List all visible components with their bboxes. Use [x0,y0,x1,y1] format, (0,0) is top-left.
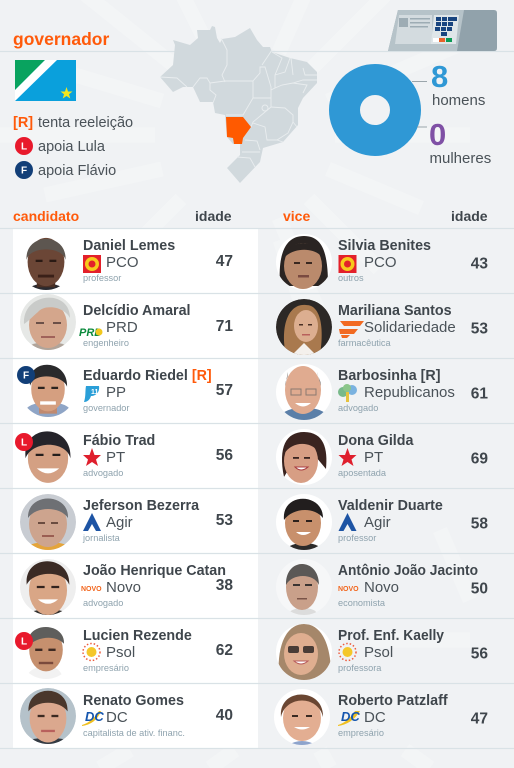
candidate: Fábio Trad: advogado [83,468,123,478]
title: governador [13,29,109,49]
candidate: Renato Gomes: DC [85,709,104,724]
candidate: Fábio Trad: Fábio Trad [83,433,155,449]
candidate: Renato Gomes: DC [106,709,128,726]
vice: Prof. Enf. Kaelly: Prof. Enf. Kaelly [338,628,444,644]
vice: Antônio João Jacinto [286,564,488,615]
vice: Mariliana Santos: Mariliana Santos [338,303,452,319]
candidate: Renato Gomes [20,688,233,749]
candidate: Lucien Rezende [15,627,233,680]
white panel: candidates column [13,229,258,748]
candidate: João Henrique Catan: advogado [83,598,123,608]
vice: Mariliana Santos: farmacêutica [338,338,391,348]
vice: Mariliana Santos: Solidariedade [364,319,456,336]
map: Mato Grosso do Sul highlighted [226,117,251,144]
vice: Silvia Benites: PCO [364,254,397,271]
vice: Antônio João Jacinto: 50 [471,580,488,598]
vice: Barbosinha: advogado [338,403,378,413]
vice: Mariliana Santos: 53 [471,320,488,338]
stat: men: homens [432,92,485,109]
candidate: João Henrique Catan [20,559,233,621]
vice: Antônio João Jacinto: NOVO [338,586,359,593]
vice: Barbosinha: 61 [471,386,488,402]
badge: supports Flávio [17,366,35,384]
badge: supports Lula: L [21,636,27,648]
vice: Silvia Benites: outros [338,273,364,283]
vice: Mariliana Santos [276,299,488,355]
badge: supports Flávio: F [23,370,29,382]
stat: men: 8 [431,59,448,94]
vice: Antônio João Jacinto: Novo [364,579,399,596]
candidate: Delcídio Amaral: engenheiro [83,338,129,348]
candidate: Delcídio Amaral: 71 [216,318,233,335]
candidate: Daniel Lemes: professor [83,273,121,283]
candidate: Lucien Rezende: empresário [83,663,129,673]
column headers: candidato [13,208,79,224]
donut chart: gender split [344,59,491,167]
candidate: João Henrique Catan: João Henrique Catan [83,563,226,579]
vice: Dona Gilda: PT [364,449,383,466]
column headers: vice [283,208,310,224]
vice: Barbosinha: Republicanos [364,384,455,401]
badge: supports Lula [15,433,33,451]
vice: Silvia Benites: Silvia Benites [338,238,431,254]
candidate: Delcídio Amaral: PRD [106,319,138,336]
vice: Barbosinha: Barbosinha [R] [338,368,440,384]
candidate: Jeferson Bezerra: 53 [216,512,233,529]
candidate: Fábio Trad [15,431,233,483]
vice: Antônio João Jacinto: Antônio João Jacinto [338,563,478,579]
vice: Prof. Enf. Kaelly: professora [338,663,382,673]
icon: Mato Grosso do Sul flag [15,60,76,101]
vice: Roberto Patzlaff: empresário [338,728,384,738]
legend: reelection: [R] [13,115,33,131]
vice: Roberto Patzlaff: DC [364,709,386,726]
candidate: Renato Gomes: capitalista de ativ. financ. [83,728,185,738]
candidate: Eduardo Riedel [17,365,233,420]
vice: Silvia Benites: 43 [471,256,488,272]
vice: Silvia Benites [276,234,488,290]
vice: Dona Gilda [276,429,488,485]
column headers [13,208,488,224]
vice: Valdenir Duarte: Valdenir Duarte [338,498,443,514]
stat: men [431,59,485,109]
vice: Valdenir Duarte: professor [338,533,376,543]
candidate: Lucien Rezende: Lucien Rezende [83,628,192,644]
vice: Barbosinha [276,364,488,420]
candidate: Daniel Lemes: PCO [106,254,139,271]
icon: voting machine [388,10,497,51]
map of Brazil [160,26,317,183]
candidate: Renato Gomes: Renato Gomes [83,693,184,709]
candidate: Delcídio Amaral: PRD [79,327,102,339]
vice: Valdenir Duarte: Agir [364,514,391,531]
candidate: Eduardo Riedel: 11 [91,389,99,396]
column headers: idade [451,208,488,224]
legend: supports Lula: apoia Lula [38,139,106,155]
candidate: João Henrique Catan: NOVO [81,586,102,593]
candidate: Jeferson Bezerra: Agir [106,514,133,531]
legend [13,115,133,179]
badge: supports Lula: L [21,438,27,448]
candidate: Eduardo Riedel: 57 [216,382,233,399]
legend: reelection: tenta reeleição [38,115,133,131]
candidate: João Henrique Catan: 38 [216,577,233,594]
vice: Dona Gilda: Dona Gilda [338,433,415,449]
vice: Valdenir Duarte [276,494,488,555]
candidate: João Henrique Catan: Novo [106,579,141,596]
legend: supports Lula: L [21,142,27,152]
vice: Prof. Enf. Kaelly: 56 [471,646,488,662]
candidate: Delcídio Amaral [20,294,233,350]
vice: Prof. Enf. Kaelly [276,624,488,680]
candidate: Daniel Lemes: 47 [216,253,233,270]
candidate: Jeferson Bezerra: jornalista [82,533,121,543]
vice: Roberto Patzlaff [274,689,488,745]
candidate: Jeferson Bezerra: Jeferson Bezerra [83,498,200,514]
candidate: Eduardo Riedel: governador [83,403,129,413]
candidate: Daniel Lemes [26,238,233,295]
vice: Dona Gilda: 69 [471,450,488,468]
vice: Roberto Patzlaff: 47 [471,710,488,728]
candidate: Fábio Trad: PT [106,449,125,466]
candidate: Eduardo Riedel: Eduardo Riedel [R] [83,368,212,384]
vice: Prof. Enf. Kaelly: Psol [364,644,393,661]
legend: supports Flávio: F [21,166,27,176]
candidate: Fábio Trad: 56 [216,447,233,464]
candidate: Renato Gomes: 40 [216,707,233,724]
badge: supports Lula [15,632,33,650]
vice: Roberto Patzlaff: Roberto Patzlaff [338,693,448,709]
candidate: Daniel Lemes: Daniel Lemes [83,238,175,254]
vice: Valdenir Duarte: 58 [471,516,488,532]
candidate: Jeferson Bezerra [20,494,232,550]
legend: supports Flávio [15,161,116,179]
legend: supports Lula [15,137,106,155]
candidate: Lucien Rezende: Psol [106,644,135,661]
candidate: Delcídio Amaral: Delcídio Amaral [83,303,191,319]
vice: Roberto Patzlaff: DC [341,709,360,724]
stat: women: 0 [429,117,446,152]
stat: women [429,117,491,167]
legend: supports Flávio: apoia Flávio [38,163,116,179]
vice: Dona Gilda: aposentada [338,468,387,478]
vice: Antônio João Jacinto: economista [338,598,386,608]
candidate: Eduardo Riedel: PP [106,384,126,401]
column headers: idade [195,208,232,224]
candidate: Lucien Rezende: 62 [216,642,233,659]
stat: women: mulheres [430,150,491,167]
